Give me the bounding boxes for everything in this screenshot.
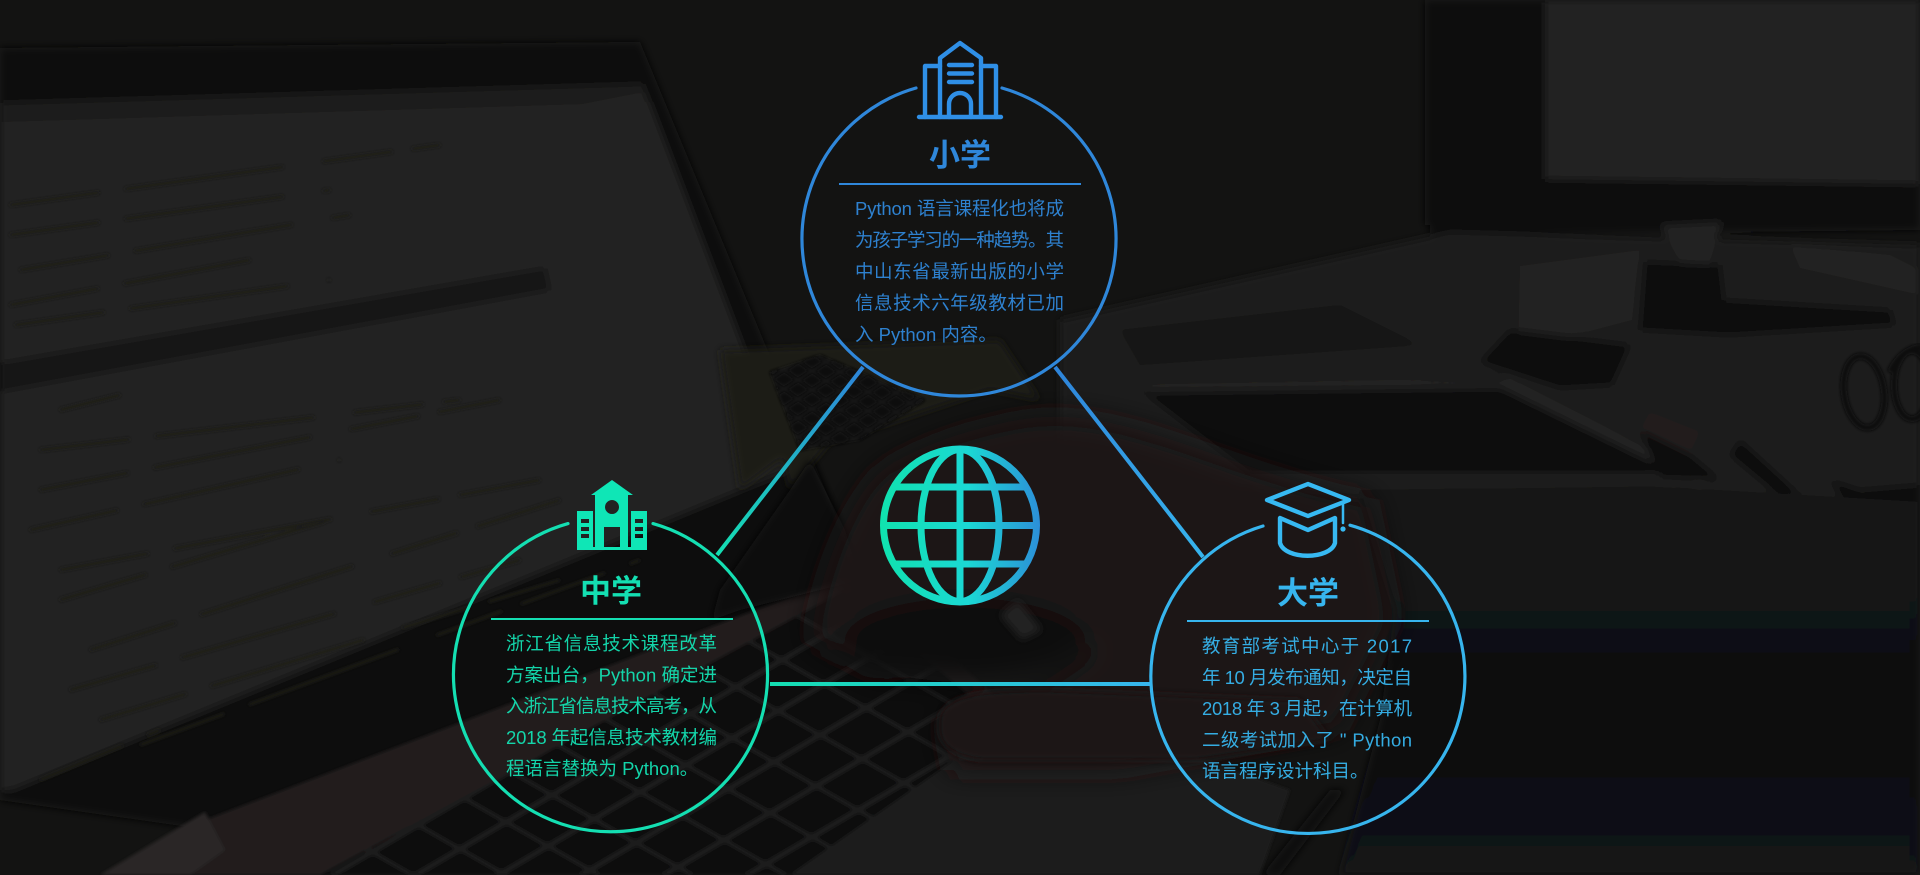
text block: 小学: 为孩子学习的一种趋势。其 (855, 230, 1064, 250)
text block: 大学: 二级考试加入了 " Python (1202, 730, 1412, 750)
panel: 小学 (802, 43, 1116, 396)
icon: middle school building (577, 480, 647, 550)
text block: 小学: 入 Python 内容。 (855, 324, 997, 345)
text block: 大学: 2018 年 3 月起，在计算机 (1202, 698, 1412, 719)
heading: 小学: 小学 (929, 138, 991, 173)
icon: globe (884, 449, 1036, 602)
text block: 中学 (506, 633, 717, 779)
panel: 中学 (454, 480, 768, 832)
text block: 中学: 2018 年起信息技术教材编 (506, 727, 717, 748)
text block: 中学: 入浙江省信息技术高考，从 (506, 696, 717, 716)
heading: 中学: 中学 (580, 574, 642, 609)
icon: graduation cap (1267, 484, 1349, 556)
laptop base and keyboard (100, 570, 1290, 875)
panel: 大学 (1151, 484, 1465, 833)
laptop (0, 42, 860, 830)
text block: 大学 (1202, 636, 1412, 782)
hand (810, 416, 1395, 770)
text block: 小学 (855, 198, 1064, 345)
text block: 中学: 方案出台，Python 确定进 (506, 664, 717, 685)
icon: primary school building (919, 43, 1001, 117)
text block: 大学: 语言程序设计科目。 (1202, 760, 1369, 782)
divider: 大学 (1187, 620, 1429, 622)
divider: 小学 (839, 183, 1081, 185)
circle outline: 小学 (802, 88, 1116, 396)
text block: 小学: Python 语言课程化也将成 (855, 198, 1064, 219)
circle outline: 大学 (1151, 525, 1465, 833)
circle outline: 中学 (454, 524, 768, 832)
text block: 中学: 程语言替换为 Python。 (506, 758, 698, 779)
connector lines of the triangle (717, 367, 1203, 684)
text block: 大学: 教育部考试中心于 2017 (1202, 636, 1412, 656)
text block: 小学: 中山东省最新出版的小学 (855, 261, 1064, 282)
heading: 大学: 大学 (1277, 576, 1339, 611)
divider: 中学 (491, 618, 733, 620)
text block: 小学: 信息技术六年级教材已加 (855, 292, 1064, 314)
text block: 中学: 浙江省信息技术课程改革 (506, 633, 717, 654)
text block: 大学: 年 10 月发布通知，决定自 (1202, 667, 1412, 688)
